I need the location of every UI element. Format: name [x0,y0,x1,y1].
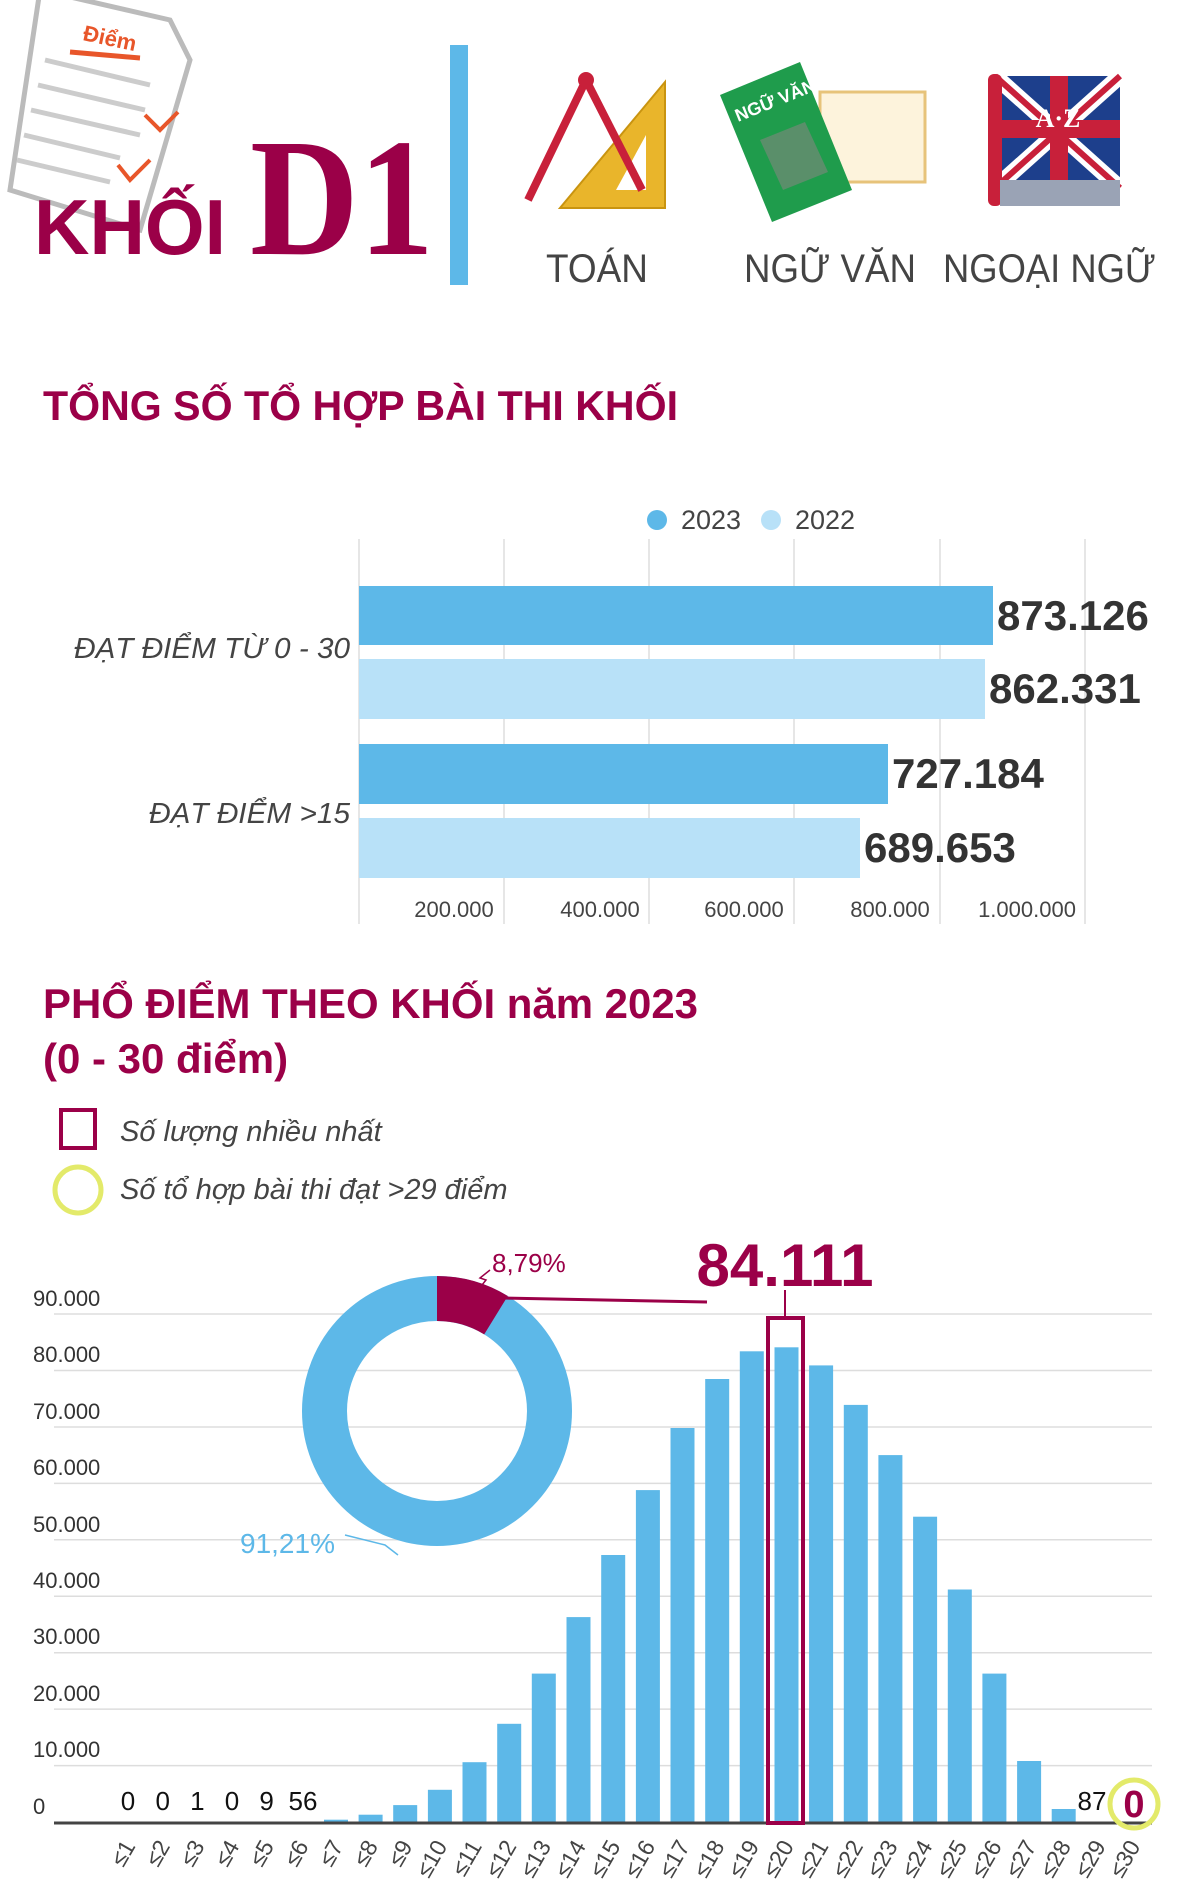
highlight: max bar [768,1318,803,1823]
histogram chart: 60.000 [33,1455,100,1480]
histogram chart: 80.000 [33,1342,100,1367]
histogram chart: ≤22 [827,1836,868,1882]
label: NGỮ VĂN: NGỮ VĂN [744,246,916,291]
histogram chart: 87 [1078,1786,1106,1816]
heading: tổng số tổ hợp: TỔNG SỐ TỔ HỢP BÀI THI KHỐI [43,380,678,429]
histogram chart: ≤11 [446,1836,487,1880]
heading: phổ điểm [43,978,698,1082]
bar chart: totals: 727.184 [892,750,1044,797]
histogram chart: ≤5 [244,1836,279,1871]
histogram chart: ≤28 [1034,1836,1076,1882]
histogram chart: 0 [225,1786,239,1816]
bar chart: totals: 689.653 [864,824,1016,871]
histogram chart [33,1286,1152,1882]
bar chart: totals: 862.331 [989,665,1141,712]
legend: histogram markers [55,1110,508,1213]
histogram chart: 50.000 [33,1512,100,1537]
histogram chart: ≤26 [965,1836,1007,1882]
label: TOÁN: TOÁN [546,246,648,291]
legend: histogram markers: Số lượng nhiều nhất [120,1116,384,1148]
histogram chart: ≤17 [653,1836,695,1882]
bar chart: totals [74,539,1149,924]
histogram chart: 20.000 [33,1681,100,1706]
label: NGOẠI NGỮ: NGOẠI NGỮ [943,246,1156,291]
bar chart: totals: 800.000 [850,897,930,922]
icon: English book: A·Z [1036,104,1080,133]
histogram chart: ≤8 [348,1836,383,1871]
histogram chart: ≤3 [174,1836,210,1871]
histogram chart: ≤6 [278,1836,314,1871]
histogram chart: 1 [190,1786,205,1816]
histogram chart: ≤2 [140,1836,175,1871]
histogram chart: ≤30 [1104,1836,1145,1882]
histogram chart: ≤15 [584,1836,626,1882]
histogram chart: ≤12 [480,1836,522,1882]
callout: zero above 29: 0 [1123,1784,1145,1826]
icon: score paper: Điểm [81,20,139,56]
bar chart: totals: 873.126 [997,592,1149,639]
histogram chart: 40.000 [33,1568,100,1593]
histogram chart: ≤20 [757,1836,799,1882]
bar chart: totals: 200.000 [414,897,494,922]
histogram chart: ≤4 [209,1835,244,1871]
histogram chart: 0 [33,1794,45,1819]
histogram chart: ≤29 [1069,1836,1111,1882]
icon: compass and triangle [528,72,665,208]
histogram chart: ≤16 [619,1836,660,1882]
icon: score paper [10,0,190,230]
heading: phổ điểm: PHỔ ĐIỂM THEO KHỐI năm 2023 [43,978,698,1027]
histogram chart: 10.000 [33,1737,100,1762]
histogram chart: ≤19 [723,1836,764,1882]
histogram chart: ≤10 [411,1836,452,1882]
title: KHỐI: KHỐI [34,183,226,271]
histogram chart: 30.000 [33,1624,100,1649]
bar chart: totals: 1.000.000 [978,897,1076,922]
title: D1: D1 [250,105,434,291]
histogram chart: ≤14 [549,1835,591,1882]
donut chart: 8,79% [492,1248,566,1278]
divider bar [450,45,468,285]
histogram chart: ≤18 [688,1836,730,1882]
histogram chart: ≤13 [515,1836,556,1882]
histogram chart: 70.000 [33,1399,100,1424]
bar chart: totals: 400.000 [560,897,640,922]
histogram chart: ≤25 [931,1836,972,1882]
bar chart: totals: 600.000 [704,897,784,922]
icon: Ngữ văn book [720,62,925,222]
icon: English book [988,74,1120,206]
histogram chart: ≤24 [896,1835,938,1882]
histogram chart: ≤7 [313,1836,348,1871]
callout: 84.111: 84.111 [697,1232,873,1299]
heading: phổ điểm: (0 - 30 điểm) [43,1035,288,1082]
legend: years [647,505,855,535]
icon: Ngữ văn book: NGỮ VĂN [732,74,818,126]
histogram chart: ≤27 [1000,1836,1041,1882]
legend: histogram markers: Số tổ hợp bài thi đạt >29 điểm [120,1174,508,1206]
histogram chart: ≤9 [382,1836,418,1871]
callout: zero above 29 [1110,1780,1158,1828]
histogram chart: 90.000 [33,1286,100,1311]
histogram chart: 9 [259,1786,274,1816]
bar chart: totals: ĐẠT ĐIỂM TỪ 0 - 30 [74,631,350,665]
histogram chart: ≤1 [105,1836,140,1871]
histogram chart: 56 [289,1786,317,1816]
histogram chart: 0 [155,1786,170,1816]
histogram chart: ≤21 [792,1836,833,1882]
donut chart: 91,21% [240,1528,335,1559]
donut chart [240,1248,707,1559]
histogram chart: ≤23 [861,1836,903,1882]
legend: years: 2023 [681,505,741,535]
histogram chart: 0 [121,1786,135,1816]
legend: years: 2022 [795,505,855,535]
bar chart: totals: ĐẠT ĐIỂM >15 [149,796,351,830]
